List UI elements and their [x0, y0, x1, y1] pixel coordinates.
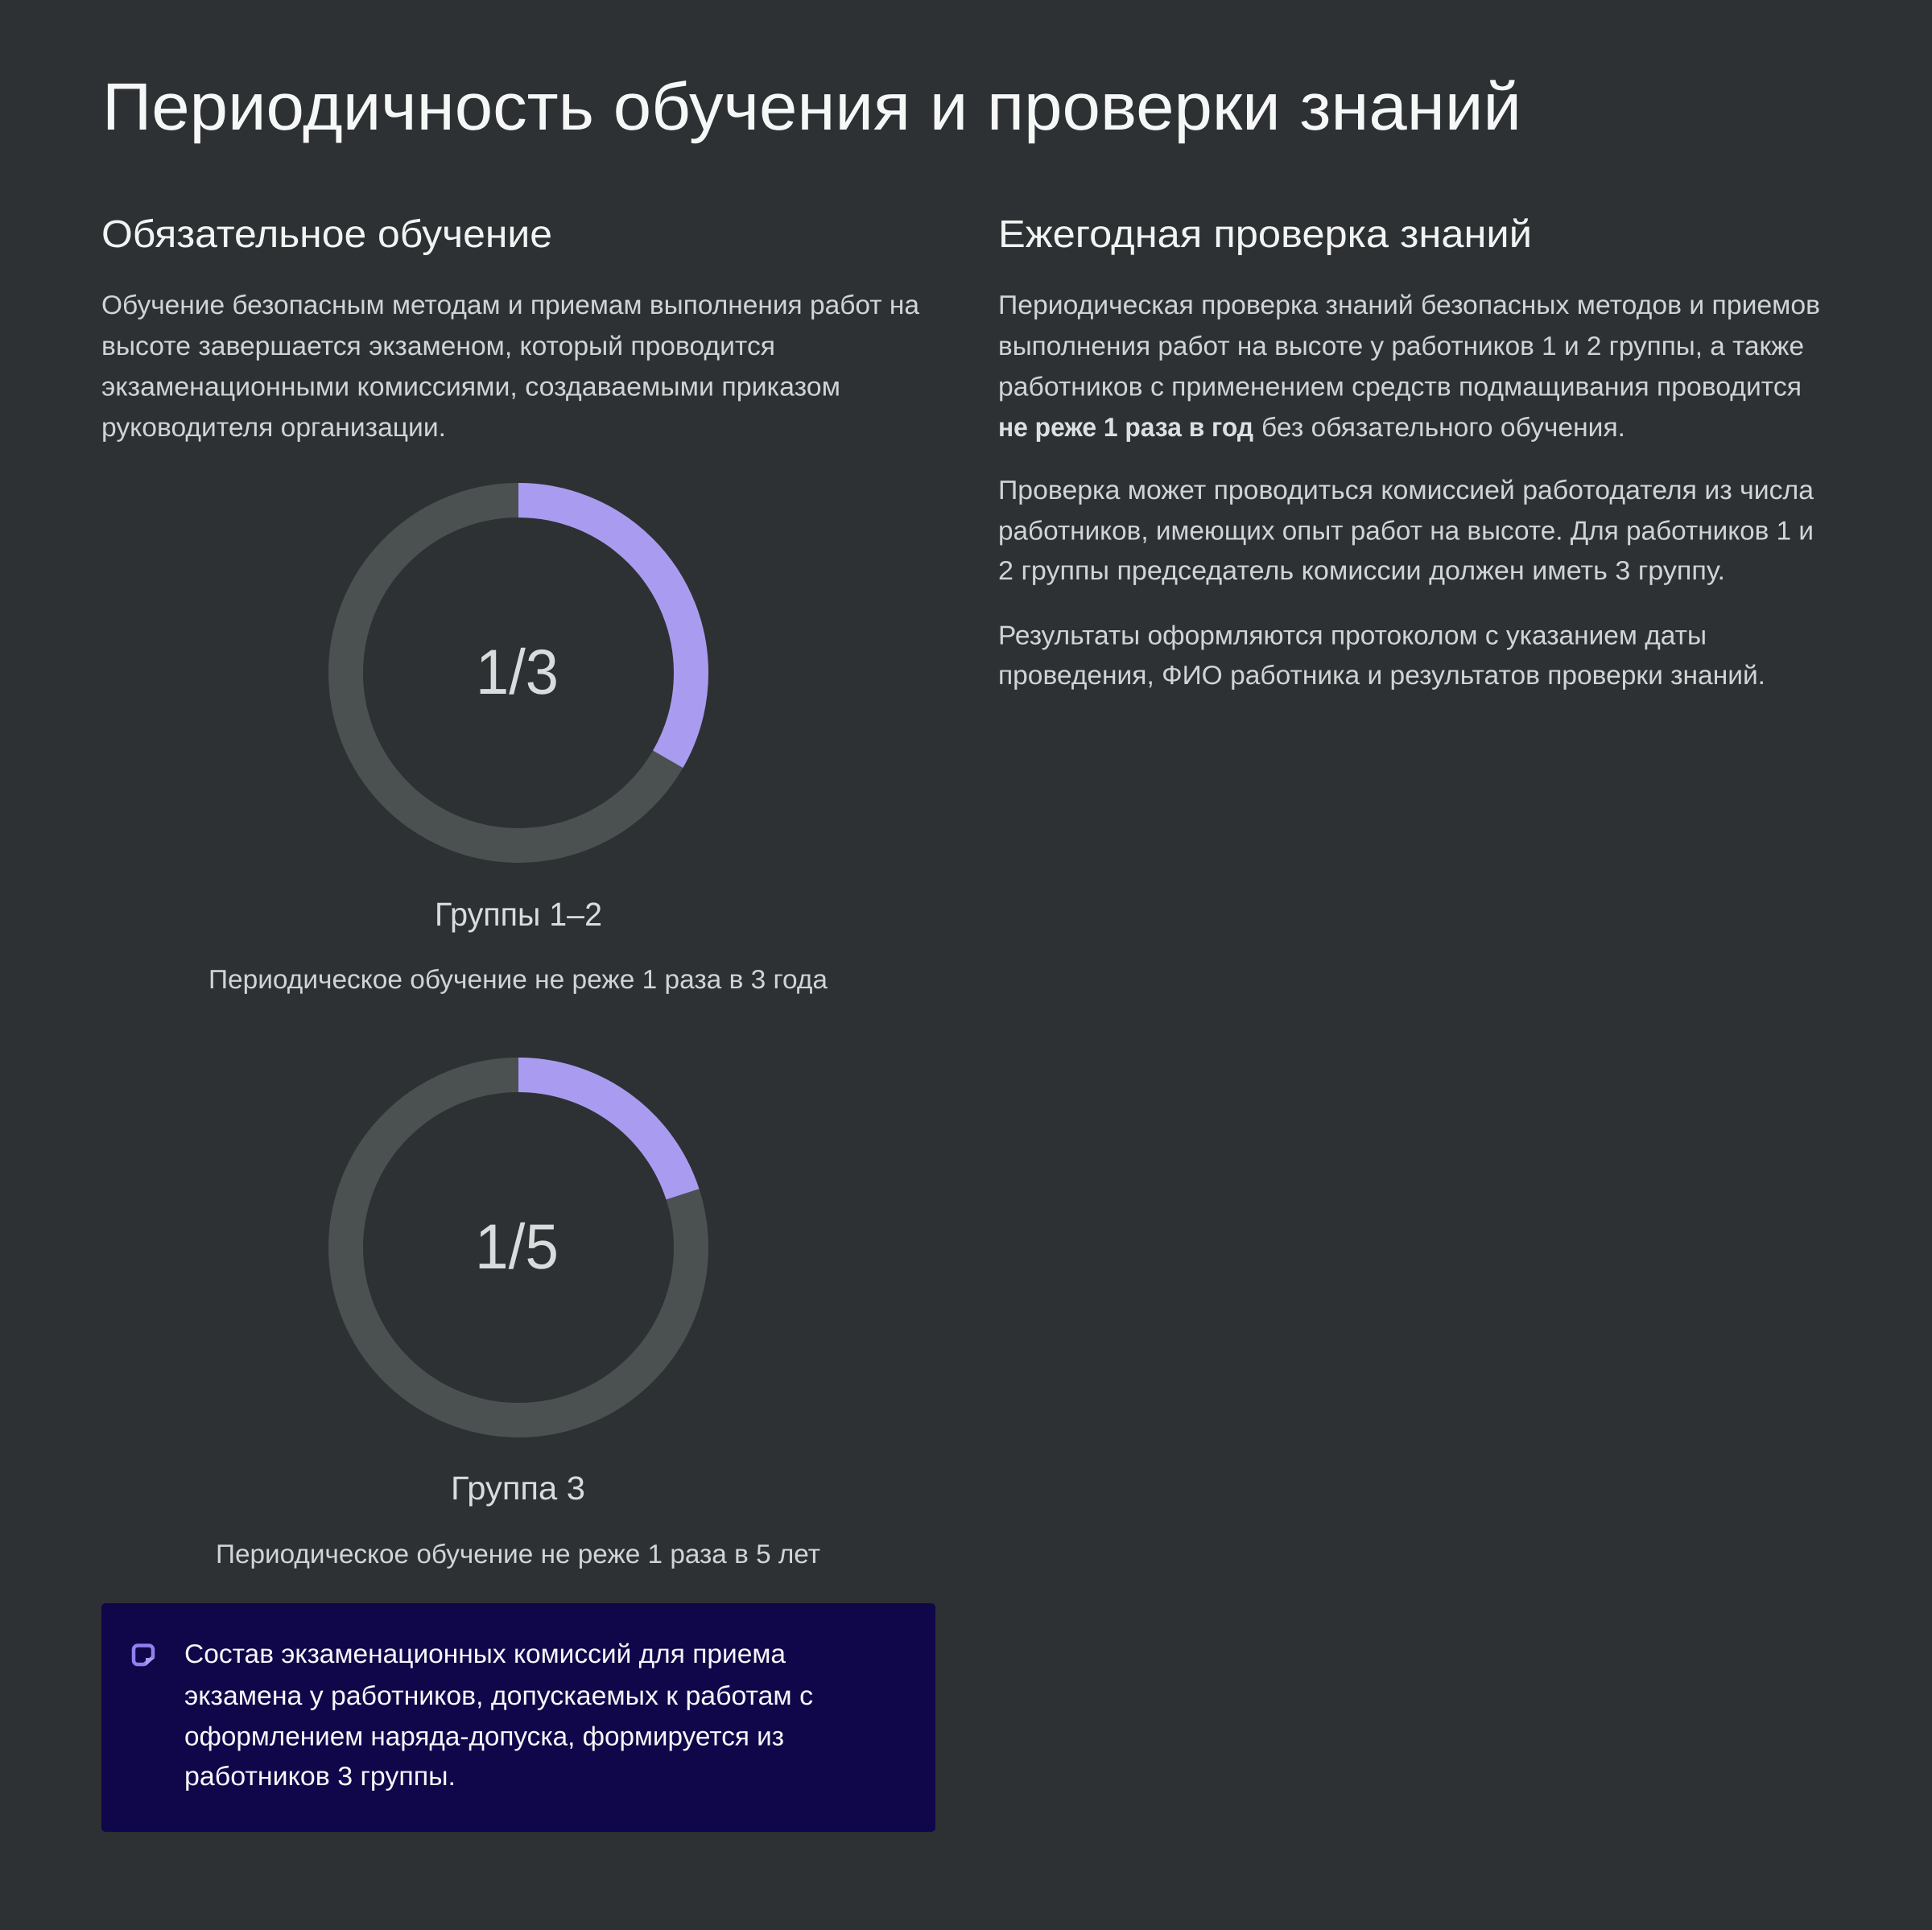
text block: paragraph 1: не реже 1 раза в год [998, 412, 1253, 442]
title: Периодичность обучения и проверки знаний [102, 69, 1521, 144]
text block: mandatory training description: Обучение безопасным методам и приемам выполнения работ на [101, 290, 920, 320]
text block: paragraph 2: Проверка может проводиться комиссией работодателя из числа [998, 475, 1814, 505]
text block: paragraph 1: Периодическая проверка знаний безопасных методов и приемов [998, 290, 1820, 320]
heading: mandatory training: Обязательное обучение [101, 213, 552, 256]
heading: annual knowledge check: Ежегодная проверка знаний [998, 213, 1532, 256]
panel: mandatory training [101, 213, 920, 1569]
text block: paragraph 1 [998, 290, 1820, 442]
text block: mandatory training description: высоте завершается экзаменом, который проводится [101, 331, 775, 361]
text block: paragraph 2: 2 группы председатель комиссии должен иметь 3 группу. [998, 555, 1725, 585]
text block: paragraph 3: проведения, ФИО работника и результатов проверки знаний. [998, 660, 1765, 690]
text block: callout text: оформлением наряда-допуска, формируется из [184, 1721, 784, 1751]
donut chart: groups 1-2: 1/3 [476, 636, 559, 707]
text block: paragraph 3: Результаты оформляются протоколом с указанием даты [998, 620, 1707, 650]
donut chart: group 3 [346, 1075, 691, 1420]
text block: mandatory training description: руководителя организации. [101, 412, 446, 442]
text block: mandatory training description: экзаменационными комиссиями, создаваемыми приказом [101, 372, 840, 401]
text block: callout text: работников 3 группы. [184, 1761, 456, 1791]
caption: group 3: Периодическое обучение не реже 1 раза в 5 лет [216, 1539, 820, 1569]
text block: callout text: Состав экзаменационных комиссий для приема [184, 1639, 786, 1668]
caption: groups 1-2: Периодическое обучение не реже 1 раза в 3 года [208, 964, 828, 994]
donut chart: groups 1-2 [346, 501, 691, 845]
donut chart: group 3: 1/5 [475, 1210, 559, 1282]
text block: mandatory training description [101, 290, 920, 442]
text block: paragraph 1: работников с применением средств подмащивания проводится [998, 372, 1802, 401]
callout: exam commission note [101, 1603, 935, 1832]
text block: paragraph 2 [998, 475, 1814, 585]
text block: paragraph 1: выполнения работ на высоте у работников 1 и 2 группы, а также [998, 331, 1804, 361]
label: group 3: Группа 3 [451, 1470, 585, 1507]
text block: callout text: экзамена у работников, допускаемых к работам с [184, 1681, 813, 1710]
label: groups 1-2: Группы 1–2 [435, 896, 602, 933]
panel: annual knowledge check [998, 213, 1820, 690]
icon: sticky note [134, 1645, 155, 1666]
text block: callout text [184, 1639, 813, 1791]
text block: paragraph 2: работников, имеющих опыт работ на высоте. Для работников 1 и [998, 515, 1814, 546]
text block: paragraph 3 [998, 620, 1765, 690]
text block: paragraph 1: без обязательного обучения. [1261, 412, 1625, 442]
